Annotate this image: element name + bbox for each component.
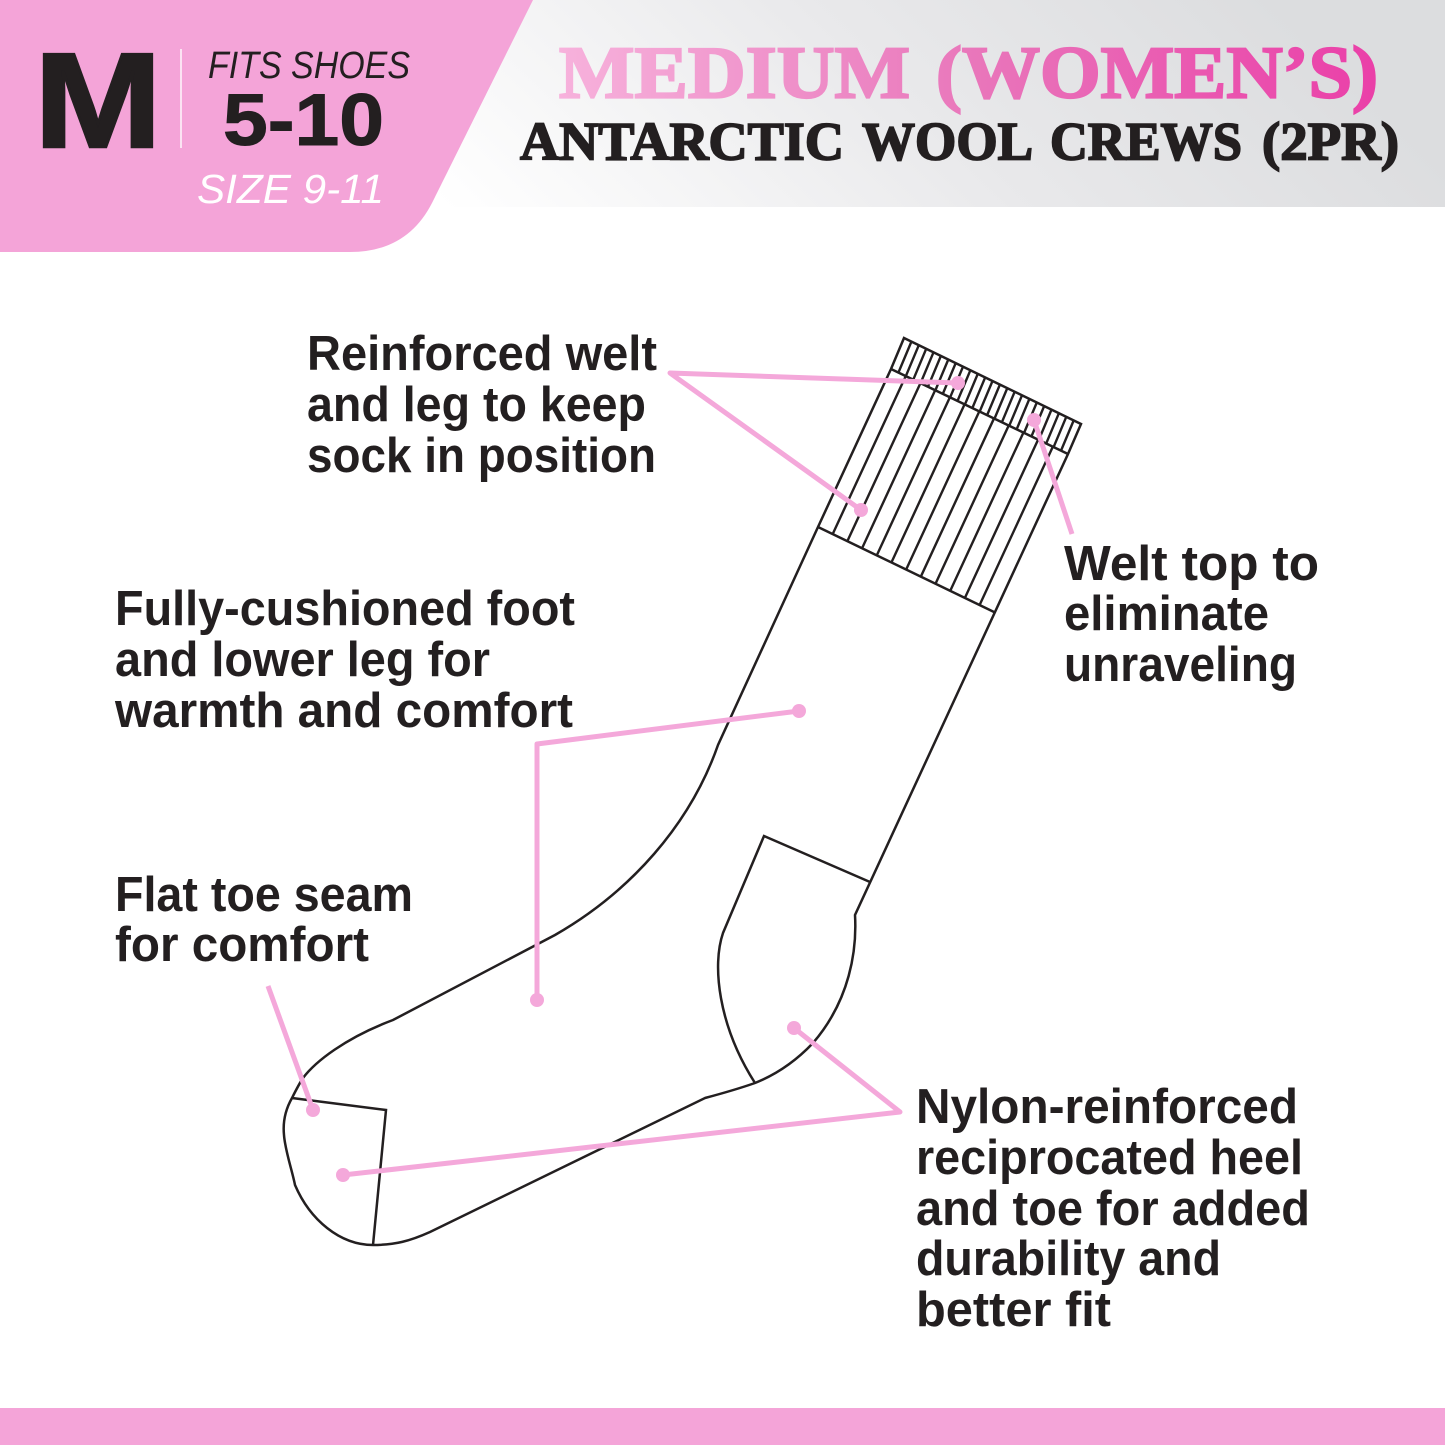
callout text: durability and — [916, 1232, 1221, 1286]
welt band line — [891, 369, 1068, 454]
callout text: Welt top to — [1064, 537, 1319, 591]
dot — [306, 1103, 320, 1117]
leg band line — [818, 527, 994, 612]
callout text: Fully-cushioned foot — [115, 582, 575, 636]
leg dot — [854, 503, 868, 517]
toe seam — [292, 1098, 386, 1245]
leader line — [537, 711, 799, 1000]
heel seam — [718, 836, 870, 1083]
callout text: eliminate — [1064, 587, 1269, 641]
badge divider — [180, 49, 182, 148]
leader line — [1034, 420, 1072, 534]
callout: welt top — [1027, 413, 1319, 692]
leader line — [268, 986, 313, 1110]
subtitle: ANTARCTIC — [520, 112, 844, 172]
dot — [1027, 413, 1041, 427]
callout text: better fit — [916, 1283, 1111, 1337]
callout: nylon heel and toe — [336, 1021, 1310, 1337]
header gray band — [400, 0, 1445, 207]
callout text: for comfort — [115, 918, 369, 972]
callout text: reciprocated heel — [916, 1131, 1303, 1185]
callout: flat toe seam — [115, 868, 413, 1117]
subtitle: (2PR) — [1262, 112, 1399, 172]
welt ribs — [898, 342, 1074, 451]
heel dot — [787, 1021, 801, 1035]
sock diagram — [284, 338, 1081, 1245]
size letter: M — [34, 25, 162, 176]
upper dot — [792, 704, 806, 718]
footer bar — [0, 1408, 1445, 1445]
callout: reinforced welt — [307, 327, 965, 517]
callout text: Reinforced welt — [307, 327, 657, 381]
subtitle: WOOL — [862, 112, 1033, 172]
size badge — [0, 0, 533, 252]
callout: cushioned foot — [114, 582, 806, 1007]
leg ribs — [833, 376, 1053, 605]
callout text: and toe for added — [916, 1182, 1310, 1236]
callout text: and lower leg for — [115, 633, 490, 687]
callout text: warmth and comfort — [114, 684, 573, 738]
leader lines — [670, 373, 958, 510]
title: (WOMEN’S) — [936, 32, 1378, 114]
callout text: Flat toe seam — [115, 868, 413, 922]
welt dot — [951, 376, 965, 390]
subtitle: CREWS — [1050, 112, 1242, 172]
shoe size range: 5-10 — [223, 80, 384, 161]
callout text: and leg to keep — [307, 378, 646, 432]
title: MEDIUM — [559, 32, 910, 114]
lower dot — [530, 993, 544, 1007]
callout text: unraveling — [1064, 638, 1297, 692]
toe dot — [336, 1168, 350, 1182]
fits shoes label: FITS SHOES — [208, 45, 410, 87]
sock outline — [284, 338, 1081, 1245]
callout text: Nylon-reinforced — [916, 1080, 1298, 1134]
callout text: sock in position — [307, 429, 656, 483]
sock size: SIZE 9-11 — [197, 166, 384, 212]
leader lines — [343, 1028, 900, 1175]
